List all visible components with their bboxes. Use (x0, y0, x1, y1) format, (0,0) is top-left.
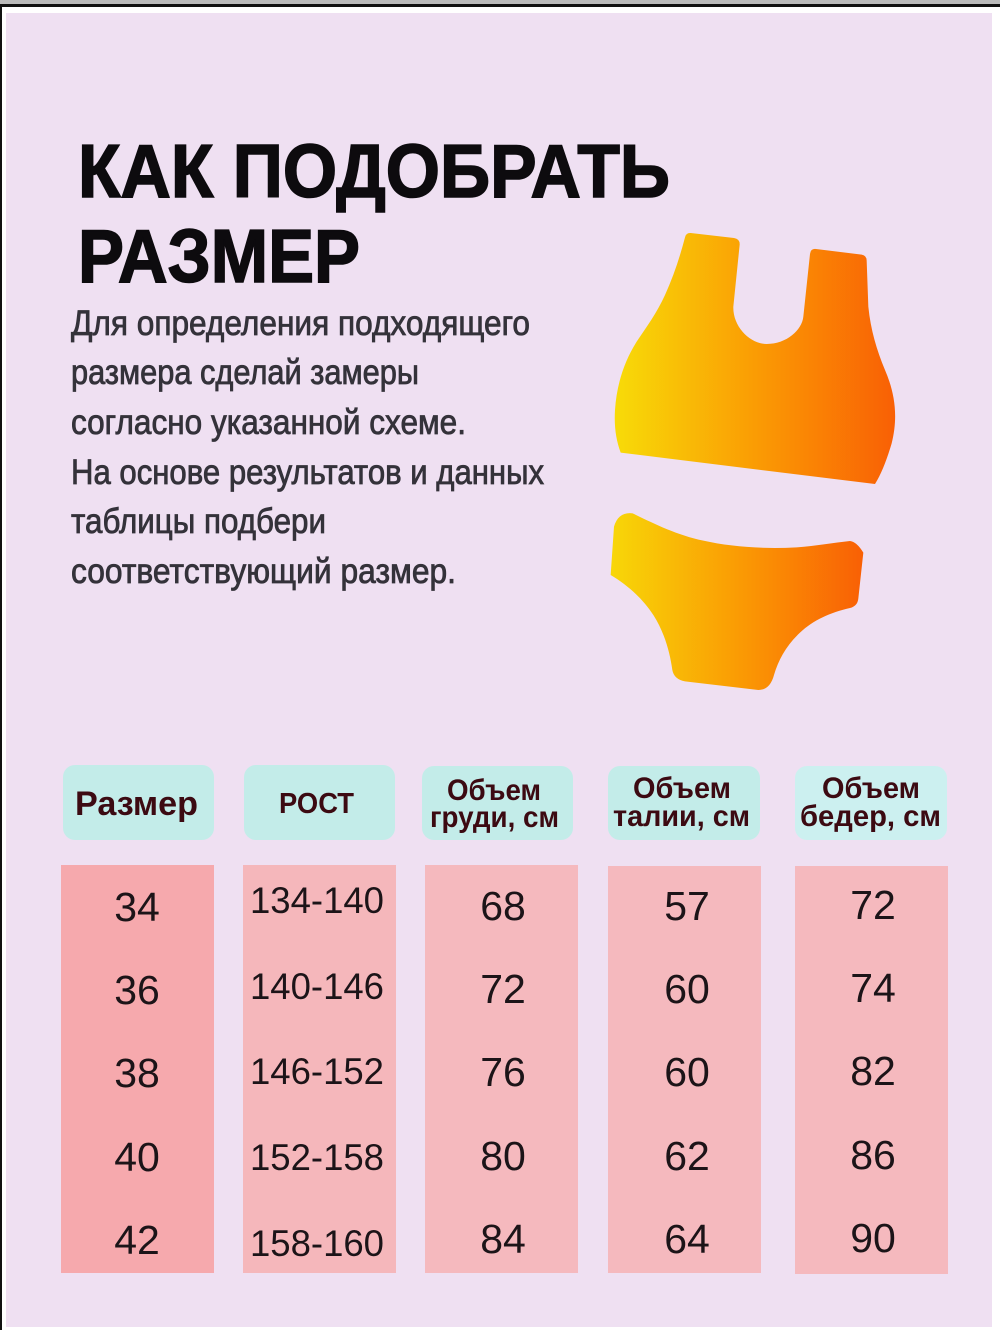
icon: swimsuit bottom (611, 513, 863, 690)
header: hips: Объем (822, 772, 920, 805)
column: height values: 158-160 (250, 1223, 384, 1264)
column: waist values (608, 866, 761, 1273)
header: height: РОСТ (279, 788, 354, 820)
column: hips values: 86 (850, 1132, 896, 1178)
column: bust values: 68 (480, 883, 526, 929)
header: size (63, 765, 214, 840)
column: size values: 36 (114, 967, 160, 1013)
header: size: Размер (75, 785, 198, 823)
column: height values: 152-158 (250, 1137, 384, 1178)
column: height values: 146-152 (250, 1051, 384, 1092)
column: waist values: 60 (664, 966, 710, 1012)
column: hips values: 72 (850, 882, 896, 928)
header: bust: Объем (447, 774, 541, 807)
description text: Для определения подходящего (71, 304, 530, 343)
description text: На основе результатов и данных (71, 453, 544, 492)
header: hips (795, 766, 947, 840)
column: hips values: 82 (850, 1048, 896, 1094)
column: height values (243, 865, 396, 1273)
header: waist: талии, см (613, 800, 750, 833)
description text: соответствующий размер. (71, 552, 456, 591)
column: size values: 34 (114, 884, 160, 930)
column: waist values: 57 (664, 883, 710, 929)
header: bust (422, 766, 573, 840)
header: hips: бедер, см (800, 800, 941, 833)
title (78, 129, 670, 298)
column: bust values: 80 (480, 1133, 526, 1179)
column: waist values: 60 (664, 1049, 710, 1095)
column: hips values (795, 866, 948, 1274)
column: bust values: 72 (480, 966, 526, 1012)
title: КАК ПОДОБРАТЬ (78, 129, 670, 213)
header: waist (608, 766, 760, 840)
column: hips values: 74 (850, 965, 896, 1011)
column: size values: 42 (114, 1217, 160, 1263)
header: height (244, 765, 395, 840)
column: size values (61, 865, 214, 1273)
column: size values: 38 (114, 1050, 160, 1096)
column: bust values: 84 (480, 1216, 526, 1262)
icon: swimsuit (611, 233, 895, 690)
description text: согласно указанной схеме. (71, 403, 466, 442)
header: waist: Объем (633, 772, 731, 805)
column: bust values (425, 865, 578, 1273)
column: hips values: 90 (850, 1215, 896, 1261)
icon: swimsuit top (615, 233, 895, 484)
column: waist values: 62 (664, 1133, 710, 1179)
description text: таблицы подбери (71, 502, 326, 541)
column: bust values: 76 (480, 1049, 526, 1095)
column: size values: 40 (114, 1134, 160, 1180)
header: bust: груди, см (430, 801, 559, 834)
description text (71, 304, 544, 591)
column: height values: 134-140 (250, 880, 384, 921)
title: РАЗМЕР (78, 214, 360, 298)
description text: размера сделай замеры (71, 353, 419, 392)
column: height values: 140-146 (250, 966, 384, 1007)
column: waist values: 64 (664, 1216, 710, 1262)
